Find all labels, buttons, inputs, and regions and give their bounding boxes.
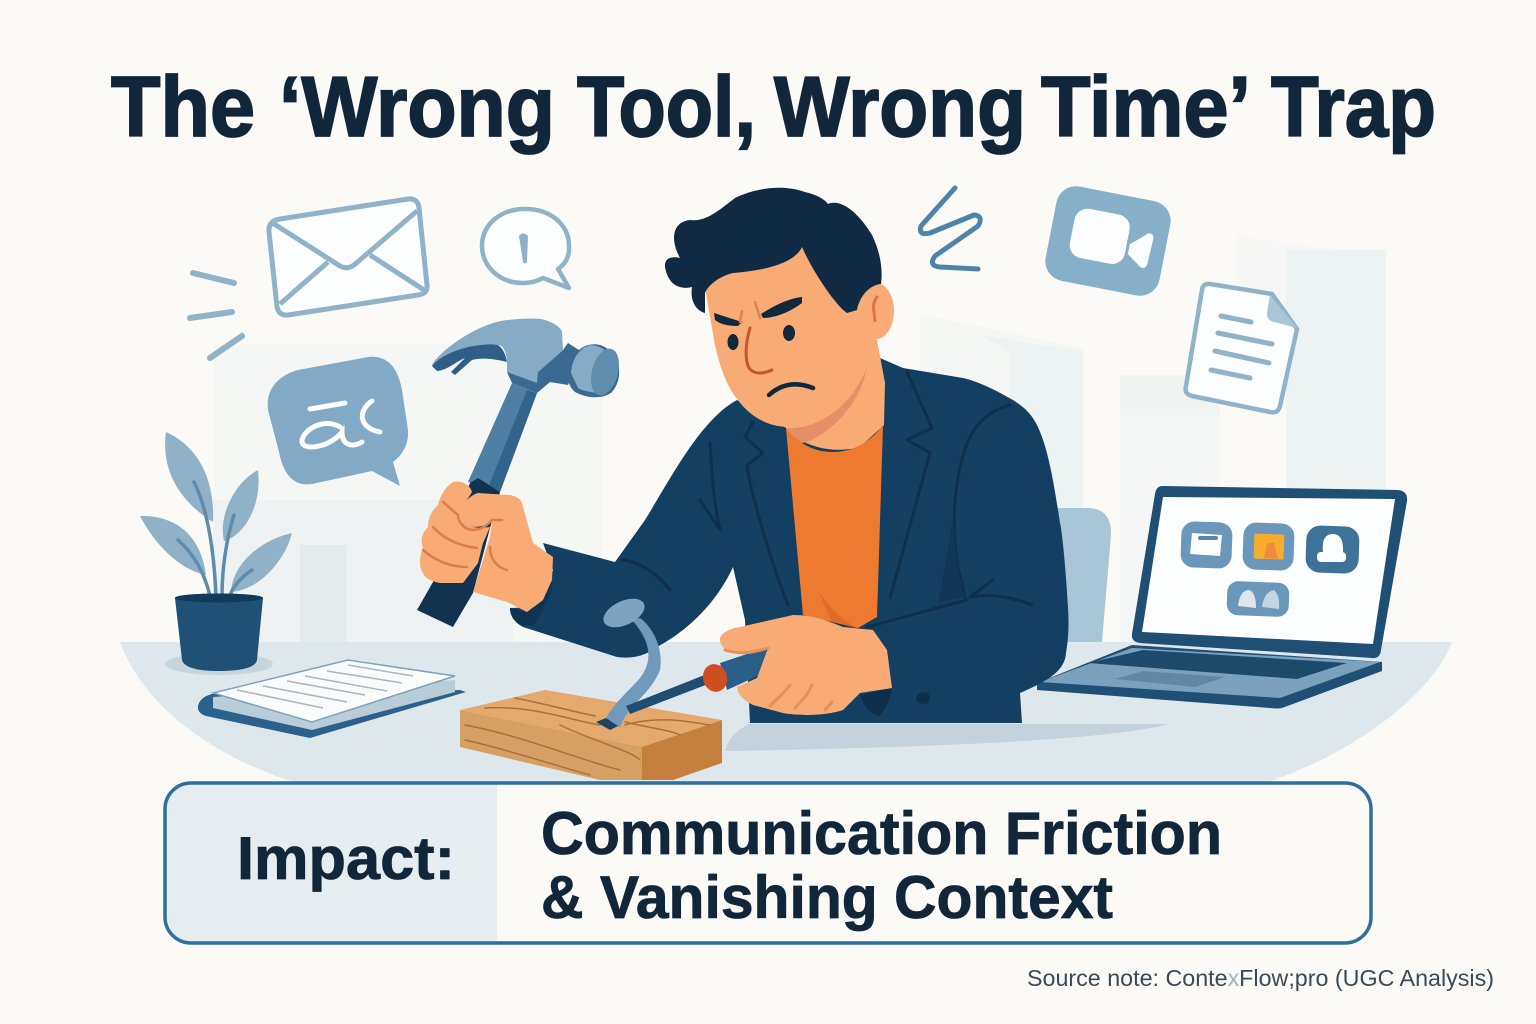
impact statement: Communication Friction [541, 800, 1222, 867]
neck [786, 320, 885, 450]
bent nail [596, 593, 661, 730]
icon: document [1186, 284, 1297, 412]
desk surface [120, 642, 1452, 784]
title: Trap [1271, 60, 1436, 155]
laptop app icons [1180, 521, 1360, 617]
laptop [1037, 486, 1407, 708]
person [510, 188, 1068, 723]
impact label: Impact: [237, 825, 455, 892]
impact callout box [165, 783, 1371, 943]
impact statement: & Vanishing Context [541, 864, 1113, 931]
background: faint city buildings [213, 236, 1386, 642]
hammer [432, 318, 624, 492]
jacket shading [938, 520, 965, 603]
title: The [111, 60, 255, 155]
icon: filled chat bubble with scribble [268, 357, 408, 486]
jacket cuff shade and button [860, 688, 930, 716]
title: Tool, [577, 60, 756, 155]
icon: envelope [269, 199, 427, 315]
jacket lapels and creases [622, 372, 1032, 627]
icon: motion dashes [190, 273, 242, 358]
facial features [714, 297, 813, 395]
chair back [1056, 508, 1111, 642]
title: ‘Wrong [279, 60, 555, 155]
title: Time’ [1041, 60, 1251, 155]
hammer face [568, 344, 624, 399]
face [705, 240, 867, 427]
wood block [460, 690, 722, 780]
right hand [720, 615, 892, 715]
title: Wrong [774, 60, 1026, 155]
icon: video call [1042, 183, 1174, 299]
person shadow on desk [725, 724, 1170, 751]
ear [858, 283, 894, 339]
jacket [510, 358, 1068, 723]
source note: Source note: ContexFlow;pro (UGC Analysis) [1027, 965, 1494, 991]
notebook [198, 660, 466, 738]
left sleeve shadow [510, 580, 552, 625]
icon: exclamation speech bubble [482, 209, 569, 288]
orange shirt [786, 425, 883, 628]
hair [665, 188, 882, 313]
screwdriver [626, 648, 775, 714]
plant in pot [140, 432, 292, 675]
left hand with hammer grip [417, 478, 553, 627]
icon: scribble squiggle [920, 188, 980, 269]
